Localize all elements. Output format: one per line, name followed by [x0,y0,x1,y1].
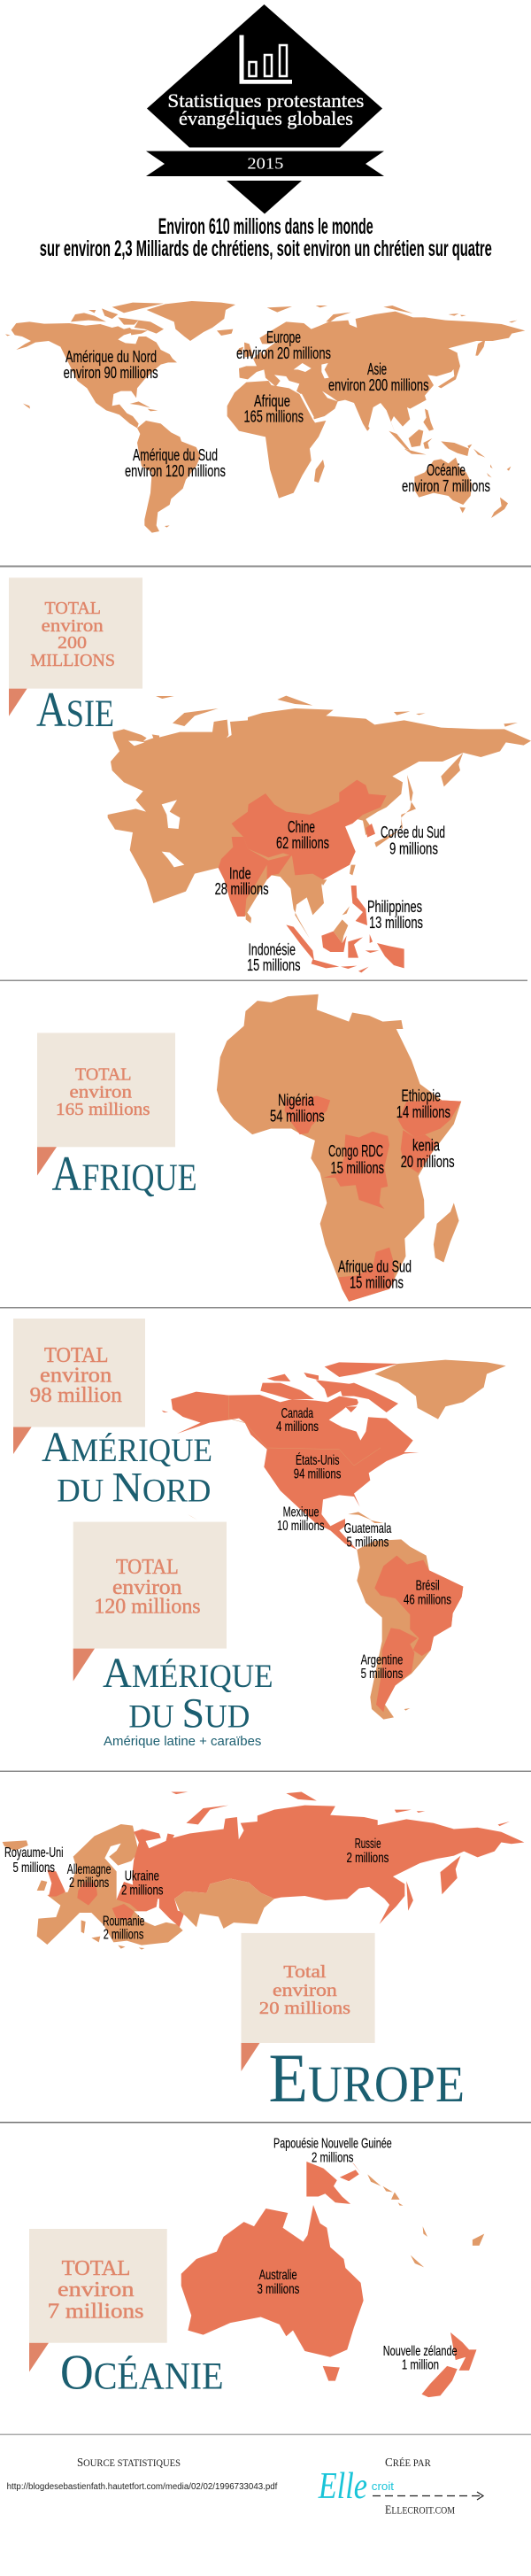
label: Royaume-Uni [4,1845,64,1876]
label: Guatemala: Guatemala [344,1521,391,1536]
label: Roumanie [103,1915,144,1943]
total box: Amérique du Nord [13,1319,145,1454]
label: Corée du Sud: 9 millions [389,839,438,857]
label: Ethiopie: 14 millions [396,1103,450,1121]
arrow [373,2492,483,2500]
label: Brésil: 46 millions [404,1593,451,1608]
panel: Asie [9,577,531,974]
label: Europe: environ 20 millions [236,344,331,362]
label: Allemagne: Allemagne [67,1862,112,1877]
label: Mexique: Mexique [283,1505,319,1520]
label: Argentine [361,1652,403,1682]
total box: Amérique du Sud: 120 millions [94,1596,201,1619]
label: Mexique: 10 millions [277,1519,325,1534]
label: Afrique [244,392,304,425]
label: Roumanie: Roumanie [103,1915,144,1929]
label: Ukraine [121,1868,163,1898]
total box [241,1933,375,2071]
label: Nouvelle zélande [383,2344,458,2373]
panel: Europe [3,1791,524,2116]
total box: Amérique du Nord: TOTAL [44,1344,108,1367]
black diamond [147,4,382,147]
heading: Amérique du Sud: DU SUD [128,1690,250,1737]
label: Afrique du Sud: Afrique du Sud [338,1257,412,1275]
label: Canada: Canada [281,1406,313,1421]
label: Asie: Asie [367,360,387,378]
total box: Total [283,1962,327,1982]
label: Brésil: Brésil [416,1578,440,1594]
label: Corée du Sud: Corée du Sud [381,824,445,841]
label: Amérique du Sud: environ 120 millions [125,462,226,480]
label: Russie [347,1837,389,1866]
label: Amérique du Sud: Amérique du Sud [133,446,218,464]
title text: Statistiques protestantes [167,89,364,112]
total box: Amérique du Nord: environ [40,1364,112,1387]
label: Chine [276,818,329,852]
total box: Amérique du Sud: environ [112,1576,182,1599]
map: highlighted European countries [47,1870,168,1926]
total box: TOTAL [75,1064,131,1084]
label: Asie: environ 200 millions [328,376,428,394]
label: Chine: 62 millions [276,834,329,852]
total box: 200 [58,633,87,653]
label: Europe [236,329,331,362]
total box: Amérique du Sud [73,1522,227,1681]
label: Allemagne: 2 millions [69,1876,109,1891]
label: Papouésie Nouvelle Guinée [273,2136,392,2165]
label: Amérique du Nord: Amérique du Nord [65,348,157,366]
total box: environ [58,2278,135,2301]
label: Australie [257,2268,299,2297]
total box [37,1033,175,1176]
label: Congo RDC: 15 millions [331,1159,384,1177]
headline: Environ 610 millions dans le monde [158,214,373,239]
map: western Europe [3,1824,183,1950]
label: Ukraine: Ukraine [125,1868,159,1884]
total box: 165 millions [56,1100,150,1119]
label: Asie [328,360,428,394]
panel: world map [5,301,525,533]
label: Royaume-Uni: 5 millions [12,1860,55,1876]
map: Asie [108,696,531,972]
footer: source [7,2456,278,2492]
label: Argentine: Argentine [361,1652,403,1667]
label: Amérique du Sud [125,446,226,480]
map: Amériques [162,1360,506,1720]
label: Nigéria: 54 millions [270,1108,325,1126]
label: Nouvelle zélande: 1 million [402,2357,439,2373]
heading: Amérique du Nord [42,1424,212,1511]
label: Canada [276,1406,319,1435]
logo: Elle croit: croit [372,2479,394,2493]
total box: Amérique du Nord: 98 million [30,1384,122,1407]
title text [167,89,364,129]
label: Afrique du Sud [338,1257,412,1292]
label: Philippines: 13 millions [369,914,423,932]
label: Royaume-Uni: Royaume-Uni [4,1845,64,1860]
panel: Amériques [13,1319,506,1749]
label: Russie: 2 millions [347,1851,389,1866]
total box: MILLIONS [30,651,115,670]
heading: Océanie: OCÉANIE [60,2345,224,2400]
label: Nigéria [270,1092,325,1126]
total box: environ [69,1082,132,1102]
logo: Elle croit: Elle [318,2466,367,2507]
label: Brésil [404,1578,451,1608]
label: Australie: Australie [259,2268,297,2283]
panel: Afrique [37,994,461,1302]
heading: Amérique du Sud: AMÉRIQUE [103,1650,273,1697]
total box: TOTAL [62,2257,130,2280]
label: Ukraine: 2 millions [121,1883,163,1898]
footer: source: SOURCE STATISTIQUES [77,2456,181,2470]
label: Afrique du Sud: 15 millions [350,1274,404,1292]
world map water [259,341,338,418]
label: Guatemala [344,1521,391,1550]
label: Océanie: environ 7 millions [402,477,490,495]
total box: 20 millions [259,1999,350,2018]
total box: environ [273,1981,337,2000]
panel: Océanie [29,2136,484,2400]
label: Guatemala: 5 millions [347,1536,389,1550]
label: États-Unis: États-Unis [296,1451,340,1468]
label: Russie: Russie [355,1837,381,1852]
total box: Amérique du Sud: TOTAL [116,1556,179,1579]
label: Australie: 3 millions [257,2282,299,2297]
label: Nouvelle zélande: Nouvelle zélande [383,2344,458,2359]
label: Papouésie Nouvelle Guinée: 2 millions [312,2150,354,2165]
footer: credit: CRÉE PAR [385,2456,431,2470]
label: Roumanie: 2 millions [104,1928,143,1943]
headline [40,214,492,261]
label: Papouésie Nouvelle Guinée: Papouésie Nouvelle Guinée [273,2136,392,2152]
label: Argentine: 5 millions [361,1667,403,1682]
label: Afrique: 165 millions [244,407,304,425]
ribbon with year [146,151,384,176]
label: kenia [401,1137,455,1171]
label: Amérique du Nord [64,348,158,382]
total box [9,577,142,716]
label: Chine: Chine [288,818,315,836]
label: Congo RDC [328,1142,384,1177]
total box: 7 millions [48,2301,144,2324]
total box [29,2229,167,2371]
subtitle: Amérique latine + caraïbes [104,1735,261,1749]
label: kenia: kenia [412,1137,441,1155]
label: Indonésie: Indonésie [248,941,296,959]
footer: credit [318,2456,483,2518]
map: Russia and Central Asia [132,1791,524,1929]
label: Indonésie: 15 millions [247,956,301,974]
label: Mexique [277,1505,325,1534]
label: Amérique du Nord: environ 90 millions [64,364,158,382]
label: Inde [215,864,269,898]
label: Philippines: Philippines [367,898,422,916]
icon: bar chart [239,35,292,84]
label: Océanie: Océanie [427,461,466,479]
label: Afrique: Afrique [254,392,290,410]
heading: Amérique du Sud [103,1650,273,1737]
label: Océanie [402,461,490,495]
label: Congo RDC: Congo RDC [328,1142,383,1160]
footer: credit: ELLECROIT.COM [385,2504,455,2518]
label: Inde: 28 millions [215,880,269,898]
total box: environ [42,616,104,636]
ribbon with year: 2015 [247,154,283,172]
label: Canada: 4 millions [276,1420,319,1435]
heading: Europe: EUROPE [269,2039,465,2116]
total box: TOTAL [44,599,101,618]
map: Océanie [181,2162,484,2397]
title text: évangéliques globales [179,107,353,129]
label: Ethiopie [396,1087,450,1121]
label: Corée du Sud [381,824,445,857]
map: Afrique [217,994,461,1302]
heading: Amérique du Nord: AMÉRIQUE [42,1424,212,1471]
world map: Americas [5,301,235,533]
label: États-Unis: 94 millions [294,1467,341,1482]
footer: source: http://blogdesebastienfath.hautetfort.com/media/02/02/1996733043.pdf [7,2482,278,2492]
bottom triangle [227,181,302,214]
heading: Amérique du Nord: DU NORD [57,1465,211,1511]
label: États-Unis [294,1451,341,1482]
label: Europe: Europe [266,329,301,346]
heading: Asie: ASIE [36,683,114,738]
label: Inde: Inde [229,864,251,882]
label: Nigéria: Nigéria [278,1092,315,1110]
label: Ethiopie: Ethiopie [402,1087,441,1105]
label: kenia: 20 millions [401,1153,455,1171]
world map: Eurasia, Africa, Oceania [227,306,525,518]
heading: Afrique: AFRIQUE [51,1147,197,1202]
title badge [146,4,384,214]
label: Philippines [367,898,423,932]
label: Indonésie [247,941,301,974]
label: Allemagne [67,1862,112,1891]
